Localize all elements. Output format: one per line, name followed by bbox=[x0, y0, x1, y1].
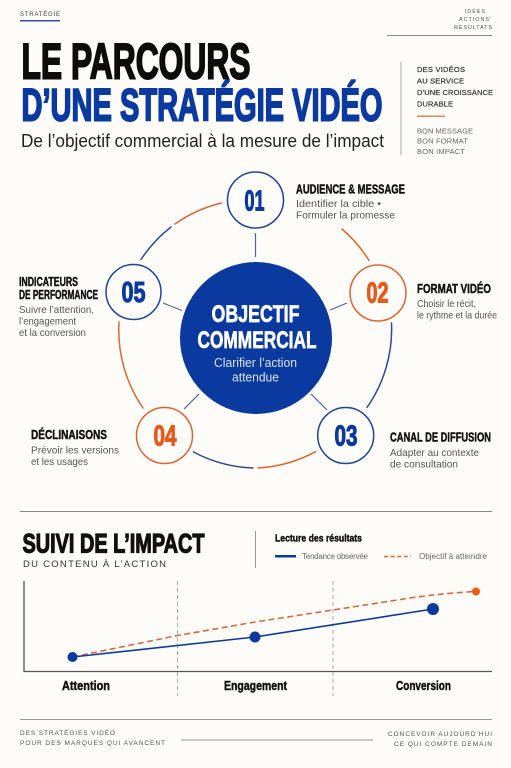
side note: D’UNE CROISSANCE bbox=[417, 88, 493, 97]
tag: idées actions résultats: IDÉES bbox=[465, 8, 485, 15]
side note: DES VIDÉOS bbox=[417, 65, 465, 74]
axis labels: Engagement bbox=[224, 679, 288, 693]
legend: Tendance observée bbox=[302, 552, 369, 561]
section heading: suivi de l'impact: DU CONTENU À L’ACTION bbox=[23, 559, 166, 570]
node 01 bbox=[228, 172, 284, 228]
label: canal de diffusion bbox=[390, 430, 491, 470]
footer right text: CONCEVOIR AUJOURD’HUI bbox=[388, 731, 492, 738]
tag: idées actions résultats: RÉSULTATS bbox=[454, 24, 492, 31]
node 02: 02 bbox=[366, 278, 388, 310]
footer right text: CE QUI COMPTE DEMAIN bbox=[394, 741, 492, 748]
node 05: 05 bbox=[122, 277, 146, 309]
legend: Lecture des résultats bbox=[275, 532, 362, 544]
label: indicateurs de performance: DE PERFORMANCE bbox=[19, 288, 98, 302]
footer bbox=[20, 728, 492, 748]
node 03: 03 bbox=[334, 420, 358, 452]
footer left text: POUR DES MARQUES QUI AVANCENT bbox=[20, 740, 165, 747]
diagram: strategy cycle bbox=[106, 172, 406, 468]
node 02 bbox=[350, 265, 406, 321]
node 04 bbox=[136, 408, 192, 464]
label: audience et message: AUDIENCE & MESSAGE bbox=[296, 182, 405, 196]
label: format vidéo: le rythme et la durée bbox=[417, 310, 497, 322]
label: format vidéo bbox=[417, 281, 497, 322]
axis labels: Attention bbox=[62, 679, 110, 693]
spokes bbox=[163, 233, 347, 410]
side note: AU SERVICE bbox=[417, 76, 464, 86]
tag: idées actions résultats bbox=[387, 8, 492, 36]
label: audience et message bbox=[296, 182, 405, 222]
side note: BON MESSAGE bbox=[417, 126, 473, 136]
footer right text bbox=[388, 731, 492, 748]
label: déclinaisons: Prévoir les versions bbox=[31, 444, 119, 456]
axis labels bbox=[62, 679, 451, 693]
tag: stratégie: STRATÉGIE bbox=[20, 11, 60, 18]
legend: Objectif à atteindre bbox=[419, 552, 488, 561]
central circle: objectif commercial: COMMERCIAL bbox=[198, 327, 316, 354]
label: déclinaisons: et les usages bbox=[31, 456, 88, 468]
side note: BON FORMAT bbox=[417, 136, 468, 146]
central circle: objectif commercial: attendue bbox=[232, 370, 279, 384]
central circle: objectif commercial: Clarifier l’action bbox=[214, 356, 297, 370]
label: indicateurs de performance: et la conversion bbox=[19, 327, 86, 339]
label: canal de diffusion: Adapter au contexte bbox=[390, 447, 479, 459]
header: top labels bbox=[20, 8, 492, 36]
footer left text bbox=[20, 728, 165, 747]
title: LE PARCOURS bbox=[22, 34, 251, 90]
ring arcs bbox=[119, 203, 392, 468]
label: indicateurs de performance: l’engagement bbox=[19, 316, 76, 328]
tag: idées actions résultats: ACTIONS' bbox=[459, 17, 491, 23]
node 01: 01 bbox=[244, 186, 265, 218]
point: objectif final bbox=[472, 588, 480, 596]
side note: DURABLE bbox=[417, 100, 453, 108]
label: canal de diffusion: de consultation bbox=[390, 458, 458, 470]
series: objectif à atteindre bbox=[72, 592, 476, 657]
title bbox=[22, 34, 382, 130]
label: audience et message: Identifier la cible • bbox=[296, 198, 381, 210]
label: format vidéo: Choisir le récit, bbox=[417, 298, 476, 310]
series: tendance observée bbox=[68, 603, 439, 662]
label: audience et message: Formuler la promesse bbox=[296, 210, 395, 222]
section heading: suivi de l'impact: SUIVI DE L’IMPACT bbox=[22, 528, 205, 558]
label: indicateurs de performance: Suivre l’attention, bbox=[19, 304, 94, 316]
subtitle: De l’objectif commercial à la mesure de l’impact bbox=[21, 131, 384, 151]
node 05 bbox=[106, 264, 161, 320]
central circle: objectif commercial: OBJECTIF bbox=[212, 301, 300, 328]
tag: stratégie bbox=[20, 11, 60, 22]
section heading: suivi de l'impact bbox=[22, 528, 205, 570]
axis labels: Conversion bbox=[396, 679, 451, 693]
node 04: 04 bbox=[154, 420, 177, 452]
label: indicateurs de performance: INDICATEURS bbox=[19, 275, 78, 289]
node 03 bbox=[318, 408, 374, 464]
label: déclinaisons: DÉCLINAISONS bbox=[31, 427, 107, 442]
central circle: objectif commercial bbox=[180, 262, 332, 414]
line chart bbox=[24, 581, 492, 696]
side note: BON IMPACT bbox=[417, 147, 465, 156]
footer left text: DES STRATÉGIES VIDÉO bbox=[20, 728, 115, 737]
label: indicateurs de performance bbox=[19, 275, 98, 339]
label: déclinaisons bbox=[31, 427, 119, 468]
legend bbox=[275, 532, 488, 561]
side note bbox=[400, 62, 493, 156]
